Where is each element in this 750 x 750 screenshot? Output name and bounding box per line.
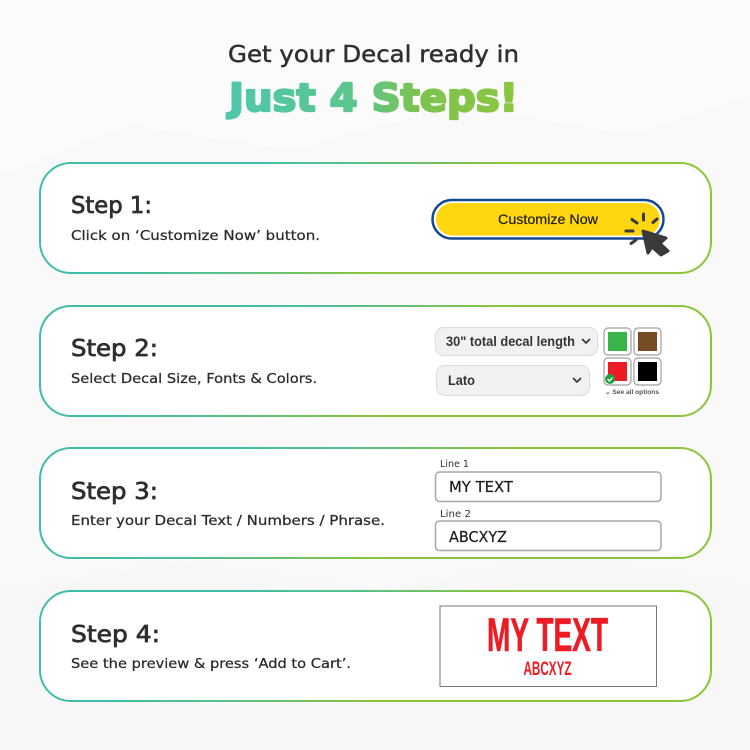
dropdown: font — [436, 366, 590, 396]
field: line 2 — [436, 509, 661, 550]
decal preview — [440, 606, 656, 686]
panel: step 2 — [40, 306, 711, 416]
step 2 heading: Step 2: — [71, 336, 158, 362]
title line 2: Just 4 Steps!: Just 4 Steps! — [226, 76, 518, 120]
step 1 heading: Step 1: — [71, 193, 152, 219]
icon: cursor click — [626, 214, 668, 255]
card outline — [40, 306, 711, 416]
field: line 2: Line 2 — [440, 509, 471, 520]
panel: step 3 — [40, 448, 711, 558]
field: line 1 — [436, 459, 661, 502]
customize now button — [432, 200, 664, 238]
card outline — [40, 591, 711, 701]
card outline — [40, 163, 711, 273]
panel: step 4 — [40, 591, 711, 701]
step 4 description: See the preview & press ‘Add to Cart’. — [71, 656, 351, 672]
decal preview: MY TEXT — [487, 608, 608, 661]
dropdown: font: Lato — [448, 373, 475, 388]
step 3 description: Enter your Decal Text / Numbers / Phrase. — [71, 513, 385, 529]
colour swatches — [604, 328, 661, 396]
customize now button: Customize Now — [498, 211, 599, 227]
title line 1: Get your Decal ready in — [228, 42, 519, 68]
title — [226, 42, 519, 120]
see all options link: ⌄ See all options — [605, 389, 659, 396]
step 4 heading: Step 4: — [71, 622, 160, 648]
dropdown: decal length: 30" total decal length — [446, 334, 575, 349]
card outline — [40, 448, 711, 558]
decal preview: ABCXYZ — [524, 658, 572, 680]
field: line 1: Line 1 — [440, 459, 469, 470]
step 2 description: Select Decal Size, Fonts & Colors. — [71, 371, 317, 387]
panel: step 1 — [40, 163, 711, 273]
step 1 description: Click on ‘Customize Now’ button. — [71, 228, 320, 244]
field: line 1: MY TEXT — [449, 478, 514, 496]
step 3 heading: Step 3: — [71, 479, 158, 505]
field: line 2: ABCXYZ — [449, 528, 507, 546]
icon: selected check — [605, 374, 615, 384]
dropdown: decal length — [436, 328, 598, 356]
